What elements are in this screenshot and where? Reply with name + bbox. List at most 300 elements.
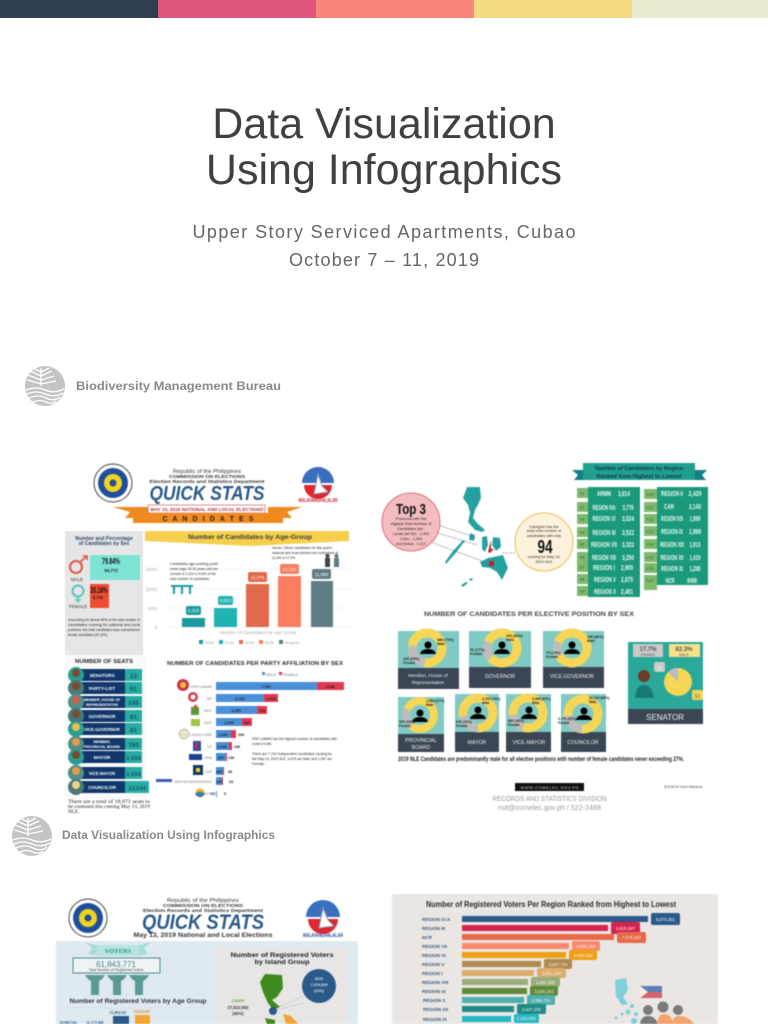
donut card: Mayor: Female xyxy=(456,724,468,728)
table: regions ranked 1 to 9: REGION I xyxy=(593,565,615,572)
panel: voters by island group: Luzon xyxy=(232,998,245,1003)
bar chart: voters per region: REGION III xyxy=(422,926,445,931)
table: regions ranked 10 to 17: 2,420 xyxy=(688,491,702,498)
ribbon: candidates by region heading: Number of Candidates by Region xyxy=(595,466,683,472)
table: regions ranked 10 to 17: REGION XIII xyxy=(660,542,684,549)
ribbon: voters: VOTERS xyxy=(105,948,132,955)
footer: website and contacts: WWW.COMELEC.GOV.PH xyxy=(520,785,579,790)
table: regions ranked 1 to 9: #2 xyxy=(579,505,585,510)
bar chart: voters per region: REGION V xyxy=(422,962,445,967)
table: regions ranked 10 to 17: #15 xyxy=(646,555,654,560)
chart heading: candidates by age group xyxy=(145,531,349,546)
panel: number of seats: 12 xyxy=(130,673,137,680)
bar chart: candidates per party: PDP-LABAN xyxy=(190,685,212,689)
ribbon: election date and candidates xyxy=(113,505,302,523)
bar chart: candidates per party: 547 xyxy=(244,721,250,725)
table: regions ranked 1 to 9: 2,900 xyxy=(621,565,633,572)
table: regions ranked 1 to 9: 2,481 xyxy=(621,589,633,596)
panel: voters by island group: NCR xyxy=(315,977,323,981)
panel: quick stats candidates xyxy=(65,460,360,818)
table: regions ranked 10 to 17: 1,288 xyxy=(690,566,701,573)
bar chart: candidates per party: 48 xyxy=(228,770,232,774)
panel: voters by island group: by Island Group xyxy=(254,959,310,966)
bar chart: candidates per party: NP xyxy=(207,697,212,701)
header text: COMMISSION ON ELECTIONS xyxy=(169,474,245,479)
bar chart: candidates per party: 2,338 xyxy=(325,685,335,689)
subtitle: venue and dates xyxy=(192,222,576,270)
bar chart: voters by age group: 15,884,502 xyxy=(109,1011,127,1015)
bar chart: candidates per party: 1,039 xyxy=(266,697,276,701)
footer: website and contacts: rsd@comelec.gov.ph / 522-2468 xyxy=(498,803,601,812)
panel: number of seats: 81 xyxy=(130,714,137,721)
donut card: Member, House of Representative: Member, House of xyxy=(408,673,448,679)
table: regions ranked 1 to 9: 3,779 xyxy=(622,505,634,512)
donut card: Provincial Board: 375 (15%) xyxy=(399,720,415,724)
card: Senator: 51 xyxy=(695,694,700,700)
table: regions ranked 1 to 9: #1 xyxy=(579,491,585,496)
bar chart: voters per region: 3,301,404 xyxy=(542,971,562,976)
panel: voters by island group: (45%) xyxy=(232,1011,244,1016)
bar chart: candidates by age group: 31-39 xyxy=(225,641,234,645)
bar chart: candidates by age group: Number of Candidates by Age Group xyxy=(220,630,297,635)
donut card: Councilor xyxy=(558,694,609,752)
table: regions ranked 10 to 17: #10 xyxy=(646,492,654,497)
callout: youth candidates xyxy=(170,562,218,594)
bar chart: voters per region: REGION IV-A xyxy=(422,917,451,922)
bar chart: candidates per party: NUMBER OF CANDIDATES PER PARTY AFFILIATION BY SEX xyxy=(167,661,343,667)
bar chart: voters per region: REGION X xyxy=(423,998,446,1003)
panel: candidates by sex: 79.84% xyxy=(102,557,120,566)
table: regions ranked 10 to 17: 1,419 xyxy=(690,555,701,562)
bar chart: candidates per party: LAKAS-CMD xyxy=(190,733,212,737)
table: regions ranked 1 to 9: REGION VIII xyxy=(592,555,616,562)
bar chart: candidates by age group: 5000 xyxy=(148,606,158,611)
panel: number of seats: 1,634 xyxy=(126,756,142,762)
panel: candidates by sex: positions, the male candidates have outnumbered xyxy=(68,627,140,632)
table: regions ranked 10 to 17: REGION II xyxy=(661,491,683,498)
bar chart: candidates by age group: 10000 xyxy=(145,587,158,592)
header text: Republic of the Philippines xyxy=(167,898,240,904)
table: regions ranked 1 to 9: REGION X xyxy=(594,589,616,596)
panel: number of seats: COUNCILOR xyxy=(88,785,117,790)
table: regions ranked 1 to 9: 3,524 xyxy=(622,516,634,523)
bar chart: candidates per party: 2,295 xyxy=(224,721,234,725)
donut card: Provincial Board: PROVINCIAL xyxy=(405,738,437,744)
donut card: Vice-Governor: Female xyxy=(546,655,558,659)
donut card: Vice-Mayor: 660 (18%) xyxy=(508,719,524,723)
bar chart: candidates per party: 1,364 xyxy=(218,733,229,737)
text block: total seats xyxy=(68,798,150,815)
table: regions ranked 1 to 9: REGION VI xyxy=(592,516,616,523)
donut card: Councilor: 20,243 (80%) xyxy=(589,696,609,700)
table: regions ranked 10 to 17: #12 xyxy=(646,517,654,522)
note: party totals: There are 7,742 Independent candidates running for xyxy=(252,751,333,756)
map: Philippines xyxy=(445,487,508,587)
panel: candidates by sex xyxy=(65,531,143,657)
bar chart: voters per region: 7,074,603 xyxy=(622,935,642,940)
table: regions ranked 10 to 17: 2,140 xyxy=(689,504,701,511)
bar chart: voters per region: 4,946,354 xyxy=(576,944,596,949)
panel: number of seats: 1,634 xyxy=(126,772,142,778)
donut card: Vice-Governor: 75 (14%) xyxy=(546,651,561,655)
panel: candidates by sex: FEMALE xyxy=(69,604,87,609)
donut card: Governor: 51 (17%) xyxy=(470,648,485,652)
donut card: Mayor: MAYOR xyxy=(468,740,487,746)
callout: top 3 provinces: Top 3 xyxy=(396,501,426,518)
bar chart: candidates by age group: 13,102 xyxy=(283,567,297,572)
callout: senior candidates: national and local election are composed of xyxy=(272,551,339,555)
title xyxy=(206,100,562,194)
panel: number of seats xyxy=(65,655,149,799)
heading: Data Visualization Using Infographics: Data Visualization Using Infographics xyxy=(62,828,275,842)
bar chart: voters per region xyxy=(422,913,680,1023)
bar chart: voters per region: 3,647,722 xyxy=(548,962,568,967)
donut card: Provincial Board: Male xyxy=(426,703,434,707)
table: regions ranked 10 to 17 xyxy=(644,487,708,590)
header text: Election Records and Statistics Department xyxy=(150,479,265,484)
bar chart: candidates per party: 139 xyxy=(228,756,234,760)
donut card: Provincial Board: BOARD xyxy=(412,745,430,751)
bar chart: voters per region: REGION I xyxy=(422,971,443,976)
callout: youth candidates: under (age 18-30 years old) are xyxy=(170,567,218,571)
panel: number of seats: VICE-GOVERNOR xyxy=(84,727,120,732)
icon: people holding sign xyxy=(85,975,149,995)
bar chart: candidates per party: 33 xyxy=(229,780,233,784)
panel: number of seats: GOVERNOR xyxy=(89,714,116,719)
table: regions ranked 10 to 17: CAR xyxy=(664,504,674,511)
callout: youth candidates: total number of candidates. xyxy=(170,577,210,581)
panel: number of seats: REPRESENTATIVE xyxy=(86,703,119,707)
callout: total registered voters xyxy=(73,958,160,973)
bar chart: voters by age group xyxy=(57,998,213,1024)
bar chart: candidates per party: AKSYON DEMOKRATIKO xyxy=(174,780,213,784)
callout: senior candidates: 11,990 or 27.3%. xyxy=(272,556,296,560)
bar chart: candidates per party: 7,784 xyxy=(261,685,272,689)
icon: BMB logo xyxy=(25,366,65,406)
table: regions ranked 1 to 9: #4 xyxy=(579,530,585,535)
text block: total seats: NLE. xyxy=(68,809,79,815)
callout: Camiguin xyxy=(503,513,573,571)
bar chart: candidates per party: 1,045 xyxy=(217,745,227,749)
donut card: Vice-Mayor xyxy=(506,694,551,752)
note: party totals xyxy=(252,736,337,766)
donut card: Mayor: Male xyxy=(482,701,490,705)
donut card: Vice-Mayor: Male xyxy=(532,701,540,705)
icon: Comelec seal xyxy=(94,464,132,502)
bar chart: candidates by age group: 11,075 xyxy=(251,575,265,580)
card: Senator: 11 xyxy=(657,666,662,672)
table: regions ranked 10 to 17: REGION IX xyxy=(661,529,683,536)
table: regions ranked 10 to 17: 1,988 xyxy=(689,529,701,536)
donut card: Councilor: COUNCILOR xyxy=(567,740,599,746)
callout: Camiguin: Camiguin has the xyxy=(529,525,559,529)
donut card: Provincial Board: 1,664 (27%) xyxy=(426,699,444,703)
footer: website and contacts: RECORDS AND STATISTICS DIVISION xyxy=(492,794,606,803)
bar chart: candidates by age group: 11,990 xyxy=(315,572,329,577)
table: regions ranked 1 to 9: #6 xyxy=(579,555,585,560)
bar chart: candidates by age group: 5,013 xyxy=(220,598,232,603)
table: regions ranked 1 to 9: 3,814 xyxy=(618,491,630,498)
bar chart: voters per region: REGION VIII xyxy=(422,980,448,985)
panel: number of seats: MAYOR xyxy=(94,755,111,760)
table: regions ranked 10 to 17: REGION IVB xyxy=(661,516,683,523)
callout: senior candidates: Senior Citizen candidates for this year's xyxy=(272,546,332,550)
ribbon: election date and candidates: MAY 13, 2019 NATIONAL AND LOCAL ELECTIONS xyxy=(150,507,264,512)
icon: globe logo: MALAYANGHALALAN xyxy=(298,498,338,504)
bar chart: candidates per party: 3,732 xyxy=(235,697,245,701)
panel: registered voters per region xyxy=(392,894,718,1024)
top colour stripe xyxy=(0,0,768,18)
ribbon: election date and candidates: C A N D I D A T E S xyxy=(162,516,254,523)
panel: number of seats: 13,544 xyxy=(128,786,147,792)
text block: total seats: There are a total of 18,072 seats to xyxy=(68,798,150,805)
heading: Biodiversity Management Bureau: Biodiversity Management Bureau xyxy=(76,379,281,393)
bar chart: voters per region: 3,081,849 xyxy=(536,980,556,985)
panel: candidates by sex: 20.16% xyxy=(90,586,108,595)
callout: top 3 provinces: Highest Total Number of xyxy=(391,522,432,526)
donut card: Governor: Male xyxy=(506,638,514,642)
table: regions ranked 10 to 17: 998 xyxy=(687,578,697,585)
callout: Camiguin: running for May 13, xyxy=(528,555,560,559)
card: Senator: FEMALE xyxy=(641,653,656,657)
callout: top 3 provinces: and Bohol - 1,117 xyxy=(396,542,426,546)
panel: number of seats: MEMBER, xyxy=(94,740,110,744)
table: regions ranked 10 to 17: REGION XI xyxy=(661,566,683,573)
callout: senior candidates xyxy=(272,546,339,567)
panel: candidates by sex: MALE xyxy=(71,577,83,582)
bar chart: candidates per party: NUP xyxy=(204,721,212,725)
bar chart: candidates by age group: 50-59 xyxy=(265,641,274,645)
callout: youth candidates: consist of 2,315 or 5.8% of the xyxy=(170,572,216,576)
footer: website and contacts xyxy=(492,783,703,812)
text block: total seats: be contested this coming May 13, 2019 xyxy=(68,804,150,810)
table: regions ranked 1 to 9: REGION VII xyxy=(591,542,617,549)
panel: voters by island group: (11%) xyxy=(314,989,325,993)
card: Senator xyxy=(628,642,703,724)
table: regions ranked 10 to 17: REGION XII xyxy=(660,555,684,562)
bar chart: voters per region: 2,183,033 xyxy=(516,1016,536,1021)
bar chart: candidates per party: 23 xyxy=(211,792,215,796)
bar chart: voters per region: REGION XII xyxy=(423,1007,448,1012)
callout: top 3 provinces xyxy=(382,493,485,562)
header text: COMMISSION ON ELECTIONS xyxy=(163,903,243,908)
bar chart: voters per region: REGION VI xyxy=(422,953,446,958)
bar chart: candidates per party: 5 xyxy=(224,792,226,796)
icon: Philippine flag xyxy=(640,986,662,998)
header text: Election Records and Statistics Department xyxy=(143,908,264,913)
header text: QUICK STATS xyxy=(142,911,264,934)
title: Using Infographics xyxy=(206,146,562,194)
bar chart: candidates per party: 246 xyxy=(234,745,240,749)
callout: Camiguin: candidates with only xyxy=(527,534,561,538)
chart heading: candidates by age group: Number of Candidates by Age-Group xyxy=(188,534,312,541)
donut card: Vice-Governor: Male xyxy=(587,639,595,643)
card: Senator: 17.7% xyxy=(639,647,657,653)
table: regions ranked 10 to 17: 1,999 xyxy=(690,516,701,523)
callout: total registered voters: Total Number of Registered Voters xyxy=(89,968,144,972)
donut card: Mayor: 2,153 (78%) xyxy=(482,697,500,701)
panel: quick stats voters xyxy=(56,898,358,1024)
header text: Republic of the Philippines xyxy=(173,469,242,475)
bar chart: voters per region: REGION VII xyxy=(422,944,447,949)
bar chart: voters per region: 2,966,702 xyxy=(531,998,551,1003)
header text: May 13, 2019 National and Local Elections xyxy=(134,933,273,939)
table: regions ranked 10 to 17: #13 xyxy=(646,529,654,534)
donut card: Vice-Governor xyxy=(543,628,604,688)
table: regions ranked 1 to 9: #8 xyxy=(579,577,585,582)
donut card: Mayor xyxy=(455,694,500,752)
header text xyxy=(134,898,273,939)
table: regions ranked 1 to 9: 2,875 xyxy=(621,577,633,584)
table: regions ranked 1 to 9: ARMM xyxy=(597,491,611,498)
note: party totals: PDP-LABAN has the highest number of candidates with xyxy=(252,736,337,741)
donut card: Governor xyxy=(469,628,531,688)
card: Senator: 82.3% xyxy=(675,647,693,653)
callout: top 3 provinces: Lanao del Sur - 1,391 xyxy=(393,532,429,536)
bar chart: voters per region: REGION IX xyxy=(423,1017,448,1022)
table: regions ranked 10 to 17: #17 xyxy=(646,578,654,583)
table: regions ranked 10 to 17: NCR xyxy=(666,578,674,585)
donut card: Vice-Mayor: VICE-MAYOR xyxy=(513,740,545,746)
map: Philippines dots xyxy=(614,978,638,1024)
panel: candidates by region and position xyxy=(382,463,708,812)
donut card: Councilor: Male xyxy=(589,700,597,704)
donut card: Member, House of Representative: Male xyxy=(437,642,445,646)
panel: number of seats: VICE-MAYOR xyxy=(89,771,115,776)
table: regions ranked 1 to 9: REGION IVA xyxy=(592,505,616,512)
bar chart: voters per region: 6,825,997 xyxy=(616,926,636,931)
donut card: Provincial Board xyxy=(398,696,444,752)
callout: top 3 provinces: Provinces with the xyxy=(396,517,426,521)
bar chart: voters per region: 3,026,343 xyxy=(534,989,554,994)
panel: candidates by sex: candidates running for national and local xyxy=(68,622,140,627)
bar chart: candidates by age group: 15000 xyxy=(145,567,158,572)
donut card: Vice-Governor: VICE-GOVERNOR xyxy=(550,674,594,680)
donut card: Member, House of Representative: Female xyxy=(403,661,415,665)
table: regions ranked 1 to 9: 3,322 xyxy=(622,542,634,549)
bar chart: candidates per party: LP xyxy=(207,745,212,749)
bar chart: candidates per party: UNA xyxy=(204,756,212,760)
card: Senator: MALE xyxy=(679,653,689,657)
panel: voters by island group: 27,522,592 xyxy=(228,1005,249,1010)
donut card: Vice-Governor: 198 (86%) xyxy=(587,635,604,639)
panel: candidates by sex: female candidates (20.16%). xyxy=(68,632,108,637)
panel: voters by island group xyxy=(216,947,348,1024)
bar chart: candidates per party: 384 xyxy=(216,770,223,774)
bar chart: candidates by age group xyxy=(145,564,350,645)
donut card: Governor: 242 (83%) xyxy=(506,634,523,638)
panel: candidates by sex: 34,772 xyxy=(104,568,118,573)
panel: number of seats: 81 xyxy=(130,727,137,734)
bar chart: voters by age group: Number of Registered Voters by Age Group xyxy=(70,998,206,1005)
table: regions ranked 1 to 9: REGION V xyxy=(594,577,616,584)
background: voters panel xyxy=(56,941,358,1024)
callout: Camiguin: least total number of xyxy=(527,529,562,533)
donut card: Governor: Female xyxy=(470,652,482,656)
icon: globe logo xyxy=(303,900,343,939)
subtitle: venue and dates: October 7 – 11, 2019 xyxy=(289,250,479,270)
header text: QUICK STATS xyxy=(150,483,265,505)
bar chart: candidates by age group: 2,315 xyxy=(188,608,200,613)
callout: top 3 provinces: Candidates are : xyxy=(397,527,425,531)
table: regions ranked 10 to 17: #11 xyxy=(646,505,654,510)
panel: number of seats: 61 xyxy=(130,686,137,693)
table: regions ranked 1 to 9: 3,250 xyxy=(622,555,634,562)
bar chart: voters per region: REGION XI xyxy=(422,989,446,994)
donut card: Vice-Mayor: Female xyxy=(508,723,520,727)
subtitle: venue and dates: Upper Story Serviced Apartments, Cubao xyxy=(192,222,576,242)
bar chart: candidates by age group: 60 above xyxy=(285,641,299,645)
donut card: Mayor: 676 (22%) xyxy=(456,720,472,724)
ribbon: candidates by region heading xyxy=(572,463,707,480)
panel: number of seats: 780 xyxy=(128,742,139,749)
panel: number of seats: MEMBER, HOUSE OF xyxy=(84,698,121,702)
bar chart: candidates per party: 115 xyxy=(216,780,222,784)
bar chart: voters per region: 2,437,256 xyxy=(522,1007,542,1012)
panel: candidates by sex: Accounting for almost 80% of the total number of xyxy=(68,617,141,622)
header text xyxy=(150,469,265,505)
bar chart: candidates per party: NPC xyxy=(204,709,212,713)
title: Data Visualization xyxy=(212,100,556,148)
table: regions ranked 10 to 17: #14 xyxy=(646,542,654,547)
bar chart: candidates by age group: 18-30 xyxy=(205,641,214,645)
card: Senator: SENATOR xyxy=(646,713,684,722)
heading: elective positions by sex: NUMBER OF CANDIDATES PER ELECTIVE POSITION BY SEX xyxy=(424,611,635,618)
bar chart: voters per region: 8,674,351 xyxy=(656,917,676,922)
callout: top 3 provinces: Cebu - 1,343 xyxy=(400,537,422,541)
bar chart: voters per region: NCR xyxy=(422,935,433,940)
table: regions ranked 1 to 9: #7 xyxy=(579,565,585,570)
chart title: Number of Registered Voters Per Region Ranked from Highest to Lowest xyxy=(426,900,676,909)
table: regions ranked 1 to 9: #3 xyxy=(579,517,585,522)
panel: number of seats: PARTY-LIST xyxy=(89,686,115,691)
bar chart: candidates per party: 3,255 xyxy=(231,709,241,713)
panel: number of seats: 245 xyxy=(128,700,139,707)
donut card: Governor: GOVERNOR xyxy=(485,674,515,680)
note: party totals: a total of 9,984. xyxy=(252,741,272,746)
table: regions ranked 1 to 9: #9 xyxy=(579,589,585,594)
donut card: Member, House of Representative: 488 (75%) xyxy=(437,638,454,642)
icon: globe logo: MALAYANGHALALAN xyxy=(303,933,343,939)
panel: number of seats: SENATORS xyxy=(89,673,115,678)
panel: candidates by sex: 8,792 xyxy=(93,595,104,600)
callout: youth candidates: Candidates age pushing youth xyxy=(170,562,218,566)
panel: voters by island group: Number of Registered Voters xyxy=(230,952,334,959)
bar chart: candidates per party: MALE xyxy=(266,673,277,677)
panel: candidates by sex: of Candidates by Sex xyxy=(79,541,129,547)
donut card: Provincial Board: Female xyxy=(399,724,411,728)
donut card: Member, House of Representative xyxy=(398,631,459,689)
ribbon: candidates by region heading: Ranked from Highest to Lowest xyxy=(596,474,682,480)
table: regions ranked 1 to 9: #5 xyxy=(579,542,585,547)
icon: BMB logo second xyxy=(12,816,52,856)
bar chart: voters by age group: 14,859,867 xyxy=(133,1010,151,1014)
party logos xyxy=(156,679,204,798)
table: regions ranked 1 to 9: 3,522 xyxy=(622,530,634,537)
bar chart: candidates per party: 827 xyxy=(218,756,224,760)
bar chart: candidates per party: FEMALE xyxy=(283,673,299,677)
table: regions ranked 1 to 9: REGION III xyxy=(592,530,616,537)
bar chart: candidates per party: LPP xyxy=(205,792,212,796)
icon: Comelec seal xyxy=(69,899,107,937)
donut card: Member, House of Representative: 165 (25%) xyxy=(403,657,420,661)
icon: voter group xyxy=(640,1002,694,1024)
bar chart: candidates per party: 764 xyxy=(259,709,266,713)
bar chart: candidates by age group: 40-49 xyxy=(245,641,254,645)
bar chart: voters per region: 4,808,830 xyxy=(573,953,593,958)
donut card: Councilor: Female xyxy=(558,721,570,725)
icon: globe logo xyxy=(298,467,338,504)
